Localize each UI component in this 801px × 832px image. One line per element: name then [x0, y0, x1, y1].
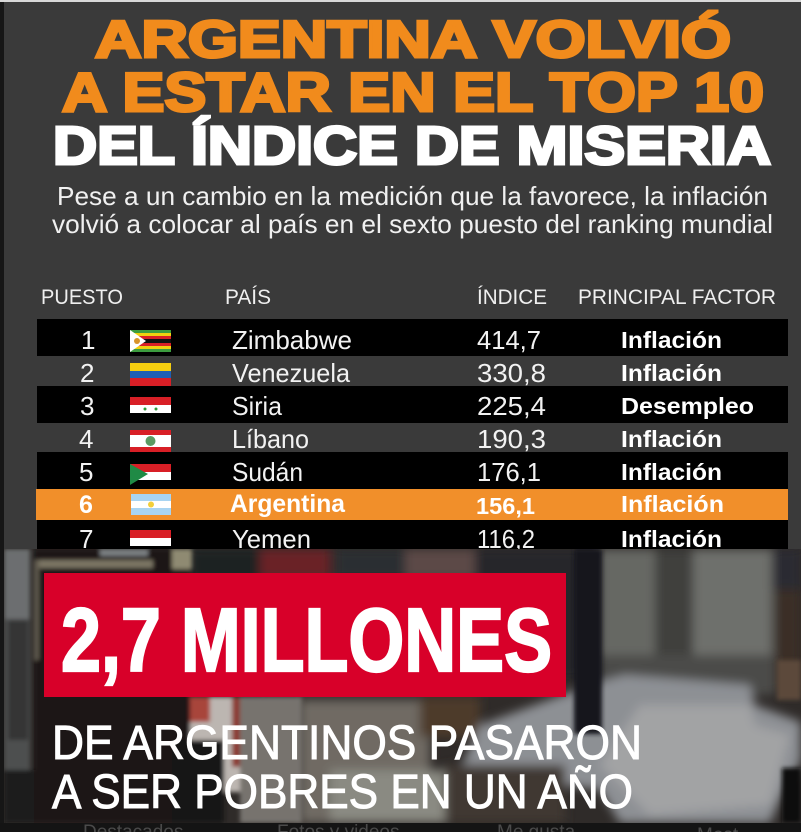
table header: [41, 286, 776, 309]
row 6: Argentina highlighted: 156,1: [476, 493, 535, 519]
title: A ESTAR EN EL TOP 10: [62, 61, 764, 123]
row 5: Sudán: Inflación: [621, 459, 722, 485]
row 3: Siria: 3: [80, 391, 94, 421]
row 7: Yemen: Yemen: [232, 524, 311, 554]
table header: PRINCIPAL FACTOR: [578, 286, 776, 309]
row 3: Siria: [37, 386, 788, 423]
row 2: Venezuela: Inflación: [621, 360, 722, 386]
row 3: Siria: Siria: [232, 391, 283, 421]
row 4: Líbano: Líbano: [232, 424, 309, 454]
row 6: Argentina highlighted: Inflación: [621, 491, 724, 517]
row 7: Yemen: 116,2: [477, 524, 535, 554]
row 4: Líbano: [79, 424, 722, 454]
row 5: Sudán: Sudán: [232, 457, 303, 487]
row 1: Zimbabwe: Inflación: [621, 327, 722, 353]
photo caption: A SER POBRES EN UN AÑO: [52, 765, 633, 819]
row 2: Venezuela: Venezuela: [232, 358, 351, 388]
photo background: [4, 549, 801, 823]
table header: PAÍS: [225, 286, 271, 309]
table header: ÍNDICE: [477, 286, 547, 309]
row 2: Venezuela: [80, 358, 722, 388]
row 7: Yemen: Inflación: [621, 526, 722, 552]
photo caption: DE ARGENTINOS PASARON: [52, 717, 642, 770]
row 1: Zimbabwe: [37, 319, 788, 356]
row 5: Sudán: 176,1: [477, 457, 541, 487]
subtitle: [52, 181, 773, 239]
row 4: Líbano: 190,3: [477, 424, 546, 454]
row 5: Sudán: 5: [79, 457, 93, 487]
subtitle: Pese a un cambio en la medición que la favorece, la inflación: [57, 181, 768, 211]
row 6: Argentina highlighted: Argentina: [230, 490, 346, 518]
row 4: Líbano: Inflación: [621, 426, 722, 452]
row 3: Siria: 225,4: [477, 391, 546, 421]
red banner: 2,7 millones: [44, 573, 566, 697]
title: [53, 11, 771, 176]
photo caption: [52, 717, 642, 819]
row 6: Argentina highlighted: 6: [79, 491, 93, 519]
row 2: Venezuela: 330,8: [477, 358, 546, 388]
row 4: Líbano: 4: [79, 424, 93, 454]
row 6: Argentina highlighted: [36, 489, 788, 520]
footer strip behind photo: [0, 822, 801, 832]
row 1: Zimbabwe: Zimbabwe: [232, 325, 352, 355]
row 2: Venezuela: 2: [80, 358, 94, 388]
title: DEL ÍNDICE DE MISERIA: [53, 116, 771, 176]
subtitle: volvió a colocar al país en el sexto puesto del ranking mundial: [52, 209, 773, 239]
row 1: Zimbabwe: 1: [81, 325, 95, 355]
title: ARGENTINA VOLVIÓ: [95, 11, 731, 69]
row 7: Yemen: 7: [79, 524, 93, 554]
row 7: Yemen: [37, 520, 788, 554]
row 5: Sudán: [37, 452, 788, 489]
ranking table: [36, 319, 788, 554]
table header: PUESTO: [41, 286, 123, 309]
row 3: Siria: Desempleo: [621, 393, 754, 419]
red banner: 2,7 millones: 2,7 MILLONES: [61, 591, 552, 691]
row 1: Zimbabwe: 414,7: [477, 325, 541, 355]
